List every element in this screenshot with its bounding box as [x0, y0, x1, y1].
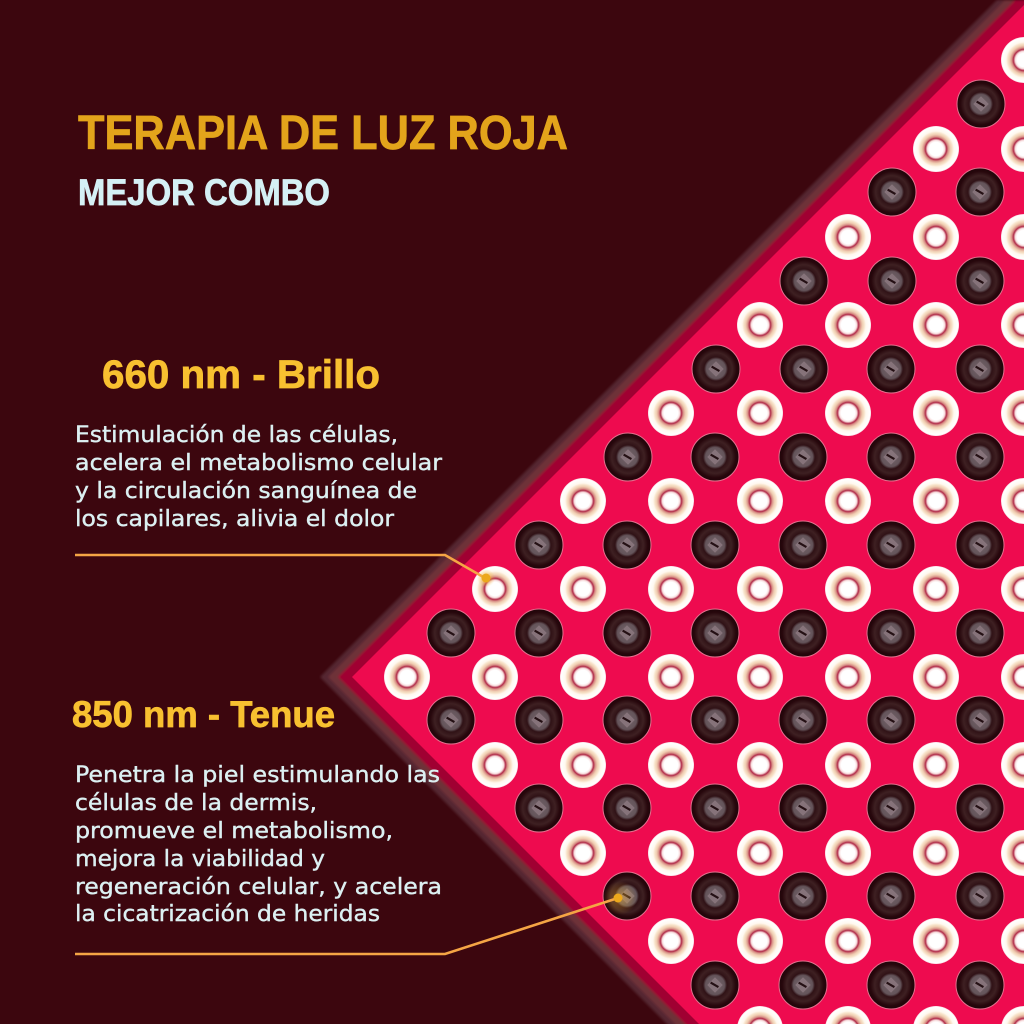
text block: 660 nm description: y la circulación sanguínea de	[75, 478, 417, 504]
dim 850 nm LEDs	[427, 80, 1005, 1009]
text block: 850 nm description: células de la dermis,	[75, 790, 317, 816]
text block: 660 nm description: Estimulación de las células,	[75, 422, 398, 448]
subtitle: MEJOR COMBO	[78, 172, 330, 213]
title: TERAPIA DE LUZ ROJA	[78, 107, 568, 160]
callout: 850 nm leader line	[75, 881, 637, 954]
heading: 660 nm: 660 nm - Brillo	[102, 353, 380, 397]
text block: 850 nm description: mejora la viabilidad y	[75, 846, 325, 872]
bright 660 nm LEDs	[384, 37, 1024, 1024]
text block: 850 nm description: promueve el metabolismo,	[75, 818, 393, 844]
text block: 850 nm description: la cicatrización de heridas	[75, 901, 380, 927]
text block: 660 nm description: los capilares, alivia el dolor	[75, 506, 395, 532]
text block: 660 nm description: acelera el metabolismo celular	[75, 450, 443, 476]
text block: 850 nm description	[75, 762, 442, 927]
panel red face	[352, 0, 1024, 1024]
callout: 660 nm leader line	[75, 555, 495, 587]
heading: 850 nm: 850 nm - Tenue	[72, 694, 335, 735]
text block: 850 nm description: Penetra la piel estimulando las	[75, 762, 440, 788]
panel: LED light panel	[320, 0, 1024, 1024]
text block: 850 nm description: regeneración celular, y acelera	[75, 874, 442, 900]
text block: 660 nm description	[75, 422, 443, 532]
panel bezel	[320, 0, 1024, 1024]
